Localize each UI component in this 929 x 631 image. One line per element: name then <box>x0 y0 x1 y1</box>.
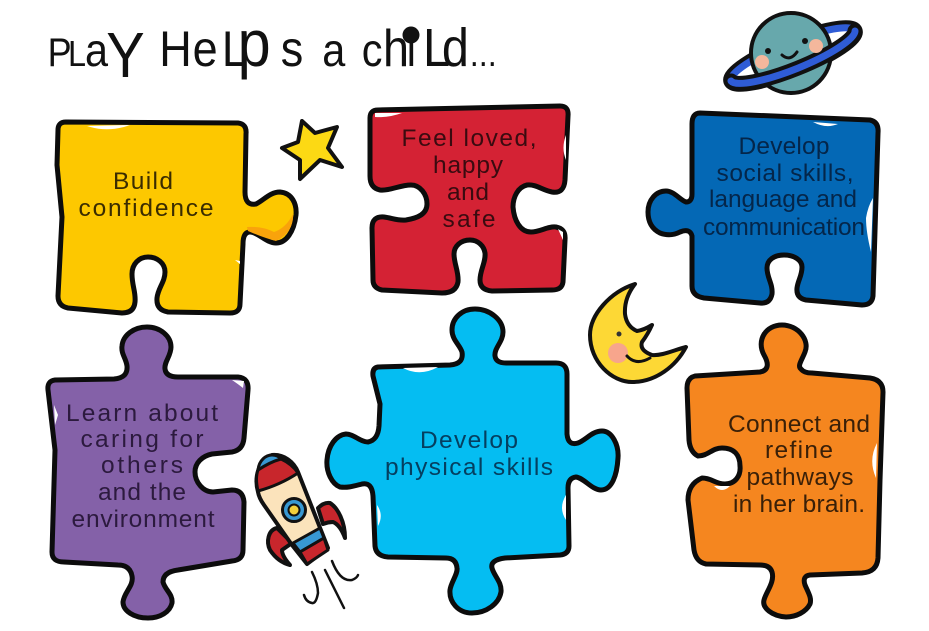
title: c <box>362 25 382 77</box>
puzzle piece: feel loved, happy and safe: and <box>447 179 489 206</box>
title: d <box>442 17 469 78</box>
title: e <box>193 22 218 78</box>
title: L <box>68 34 86 74</box>
puzzle piece: develop physical skills <box>327 309 618 613</box>
puzzle piece: learn about caring: environment <box>72 506 215 533</box>
title: h <box>383 20 409 78</box>
puzzle piece: learn about caring: caring for <box>80 426 204 453</box>
puzzle piece: connect and refine pathways: pathways <box>746 464 854 491</box>
title: L <box>222 22 247 78</box>
title: a <box>85 25 109 77</box>
label: Develop <box>420 427 518 454</box>
puzzle piece: learn about caring <box>48 327 248 618</box>
title: s <box>281 22 303 78</box>
title: H <box>159 22 192 78</box>
title: Y <box>106 19 145 91</box>
puzzle piece: build confidence <box>57 122 296 313</box>
puzzle piece: connect and refine pathways: in her brain. <box>733 491 865 518</box>
puzzle piece: feel loved, happy and safe <box>370 106 568 293</box>
title: P <box>48 31 72 75</box>
icon: rocket <box>256 455 358 608</box>
puzzle piece: develop social skills: social skills, <box>716 160 854 187</box>
puzzle piece: develop social skills: communication <box>703 214 865 241</box>
puzzle piece: develop social skills <box>648 113 878 305</box>
label: Feel loved, <box>402 125 536 152</box>
puzzle piece: feel loved, happy and safe: safe <box>442 206 496 233</box>
label: Learn about <box>66 400 218 427</box>
puzzle piece: develop social skills: language and <box>709 186 857 213</box>
title: i <box>407 25 416 77</box>
title: ... <box>470 34 497 74</box>
puzzle piece: connect and refine pathways <box>687 325 883 617</box>
title: a <box>322 25 346 77</box>
icon: crescent moon <box>590 284 686 382</box>
title: L <box>423 17 450 78</box>
icon: planet <box>726 13 860 94</box>
puzzle piece: develop physical skills: physical skills <box>385 454 553 481</box>
label: Connect and <box>728 411 870 438</box>
title <box>48 7 497 91</box>
puzzle piece: feel loved, happy and safe: happy <box>433 152 504 179</box>
puzzle piece: learn about caring: and the <box>98 479 186 506</box>
label: Build <box>113 168 173 195</box>
title: p <box>238 7 271 81</box>
label: Develop <box>738 133 830 160</box>
puzzle piece: connect and refine pathways: refine <box>765 437 833 464</box>
icon: star <box>282 121 342 179</box>
puzzle piece: learn about caring: others <box>101 452 183 479</box>
puzzle piece: build confidence: confidence <box>78 195 214 222</box>
